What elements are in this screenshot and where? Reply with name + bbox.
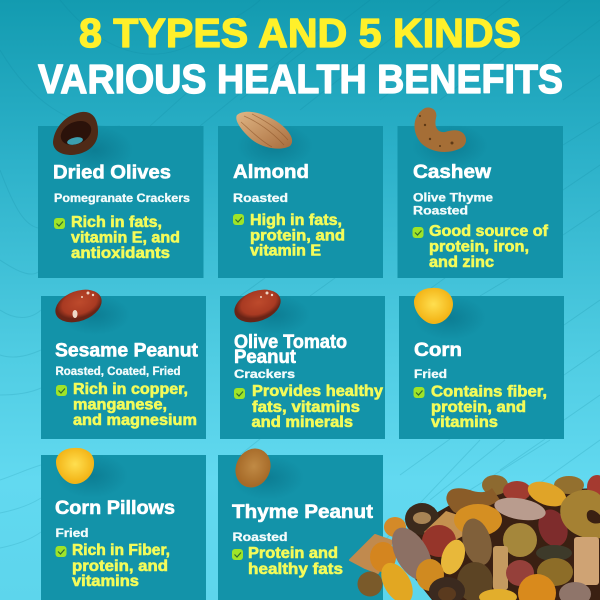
snack mix pile — [350, 475, 600, 600]
subtitle: Fried — [56, 526, 88, 540]
benefit text — [73, 381, 197, 429]
panel: dried olives — [38, 112, 204, 278]
benefit text: vitamins — [72, 573, 139, 590]
heading: Olive Tomato — [234, 331, 347, 353]
icon: olive tomato peanut — [230, 284, 285, 328]
icon: check — [233, 214, 244, 225]
benefit text: and magnesium — [73, 412, 197, 429]
benefit text: vitamin E, and — [71, 230, 180, 246]
benefit text: and minerals — [252, 414, 353, 431]
icon: check — [234, 388, 245, 399]
subtitle: Pomegranate Crackers — [54, 191, 190, 205]
icon: cashew — [414, 108, 466, 152]
benefit text — [250, 212, 345, 260]
benefit text: Provides healthy — [252, 383, 383, 400]
icon: sesame peanut — [51, 284, 106, 328]
icon: corn — [414, 288, 453, 324]
panel: corn — [399, 288, 564, 439]
title line 2: VARIOUS HEALTH BENEFITS — [38, 56, 563, 102]
benefit text: protein, iron, — [429, 238, 529, 256]
panel: olive tomato peanut — [220, 284, 385, 439]
benefit text: Contains fiber, — [431, 384, 547, 400]
benefit text: Rich in copper, — [73, 381, 188, 398]
benefit text: antioxidants — [71, 245, 170, 262]
heading: Corn — [414, 339, 462, 361]
subtitle: Roasted — [413, 204, 468, 218]
subtitle: Fried — [414, 367, 447, 381]
benefit text: vitamin E — [250, 242, 321, 260]
benefit text: High in fats, — [250, 212, 342, 229]
benefit text — [429, 223, 549, 271]
benefit text: protein, and — [431, 399, 526, 416]
icon: check — [232, 549, 243, 560]
benefit text — [431, 384, 547, 431]
heading: Thyme Peanut — [232, 501, 374, 523]
title line 1: 8 TYPES AND 5 KINDS — [79, 10, 521, 56]
benefit text — [71, 214, 180, 262]
benefit text: and zinc — [429, 254, 494, 271]
icon: check — [56, 546, 66, 557]
heading: Cashew — [413, 161, 492, 183]
icon: thyme peanut — [229, 443, 277, 493]
title — [38, 10, 563, 102]
heading: Dried Olives — [53, 162, 171, 184]
heading: Almond — [233, 161, 309, 183]
benefit text: protein, and — [250, 228, 345, 244]
benefit text: fats, vitamins — [252, 399, 360, 416]
subtitle: Roasted — [233, 191, 288, 205]
subtitle: Olive Thyme — [413, 190, 493, 204]
subtitle: Roasted, Coated, Fried — [56, 364, 180, 378]
benefit text: vitamins — [431, 414, 498, 431]
benefit text — [248, 545, 343, 578]
benefit text: healthy fats — [248, 561, 343, 578]
benefit text: protein, and — [72, 558, 168, 575]
icon: check — [56, 385, 67, 396]
heading — [234, 331, 347, 368]
panel: cashew — [398, 108, 563, 278]
subtitle: Roasted — [232, 530, 288, 544]
icon: almond — [236, 112, 292, 149]
benefit text — [72, 542, 170, 590]
heading: Peanut — [234, 346, 296, 368]
heading: Sesame Peanut — [55, 340, 199, 362]
icon: corn pillow — [56, 448, 94, 484]
panel: almond — [218, 112, 383, 278]
benefit text — [252, 383, 383, 431]
icon: dried olive — [53, 112, 98, 155]
panel: corn pillows — [41, 448, 206, 600]
icon: check — [414, 387, 424, 398]
benefit text: Protein and — [248, 545, 338, 562]
benefit text: Good source of — [429, 223, 549, 240]
subtitle: Crackers — [234, 367, 295, 381]
benefit text: manganese, — [73, 396, 167, 414]
icon: check — [54, 218, 65, 229]
panel: sesame peanut — [41, 284, 206, 439]
benefit text: Rich in fats, — [71, 214, 162, 231]
panel: thyme peanut — [218, 443, 383, 600]
benefit text: Rich in Fiber, — [72, 542, 170, 559]
icon: check — [412, 227, 424, 238]
heading: Corn Pillows — [55, 497, 175, 519]
subtitle — [413, 190, 493, 218]
